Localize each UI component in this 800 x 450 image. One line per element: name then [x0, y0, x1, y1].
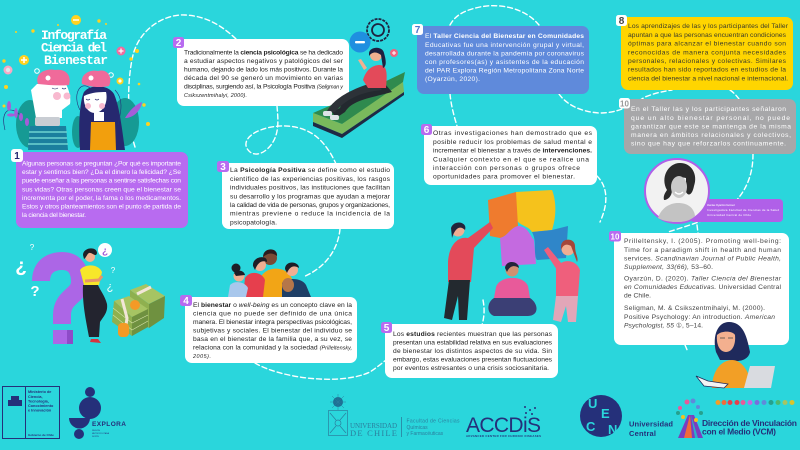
panel 1: intro: la ciencia del bienestar. [22, 212, 86, 219]
panel: references: en Comunidades Educativas. Universidad Central [624, 284, 782, 291]
panel: references: de Chile. [624, 293, 651, 300]
illustration: question mark and thinking man: ? [30, 283, 40, 300]
badge 4: 4 [183, 296, 189, 307]
portrait photo [645, 159, 709, 223]
photo caption: Universidad Central de Chile [707, 213, 751, 217]
panel: limitaciones: En el Taller las y los participantes señalaron [631, 106, 786, 113]
logo: Universidad de Chile [328, 394, 397, 438]
badge 10 gray: 10 [620, 100, 629, 108]
panel 2: ciencia psicológica: Tradicionalmente la ciencia psicológica se ha dedicado [184, 50, 343, 56]
panel 1: intro: Algunas personas se preguntan ¿Por qué es importante [22, 160, 181, 168]
panel 4: bienestar: El bienestar o well-being es un concepto clave en la [193, 302, 352, 309]
title: Infografía [41, 28, 107, 43]
badge 6 [421, 124, 432, 136]
badge 8: 8 [619, 16, 625, 27]
panel 7: taller [417, 26, 589, 94]
panel 3: psicología positiva: científico de las experiencias positivas, los rasgos [230, 176, 391, 183]
badge 5: 5 [384, 323, 390, 334]
panel: limitaciones: que un alto bienestar personal, no puede [631, 115, 790, 122]
badge 6: 6 [424, 125, 430, 136]
logo: Universidad Central: Universidad [629, 420, 673, 428]
illustration: people assembling puzzle [444, 190, 580, 322]
logo: Universidad Central: N [608, 422, 617, 437]
panel 8: aprendizajes: apuntan a que las personas encuentran condiciones [628, 32, 787, 39]
badge 2 [173, 37, 184, 49]
panel 5: estudios: embargo, estas evaluaciones presentan fluctuaciones [393, 356, 553, 364]
logo: Universidad de Chile: UNIVERSIDAD [350, 422, 397, 430]
panel 4: bienestar [185, 297, 357, 363]
panel 8: aprendizajes: reconocidas de manera conjunta necesidades [628, 49, 787, 56]
panel 7: taller: Educativas fue una intervención grupal y virtual, [425, 42, 584, 49]
panel 3: psicología positiva [222, 163, 394, 229]
logo: Ministerio de Ciencia: Ciencia, [28, 395, 43, 399]
panel 2: ciencia psicológica: a estudiar aspectos negativos y patológicos del ser [184, 58, 344, 65]
panel: references: Prilleltensky, I. (2005). Promoting well-being: [624, 238, 781, 245]
panel 1: intro: estar y sentirnos bien? ¿Da el dinero la felicidad? ¿Se [22, 169, 181, 176]
logo: Facultad de Ciencias: Químicas [406, 425, 428, 431]
panel 6: intervenciones: Cualquier contexto en el que se realice una [433, 156, 589, 163]
logo: Facultad de Ciencias: y Farmacéuticas [406, 431, 444, 437]
panel 8: aprendizajes: ciencia del bienestar a nivel nacional e internacional. [628, 75, 788, 82]
panel 7: taller: del PAR Explora Región Metropolitana Zona Norte [425, 68, 584, 75]
panel 3: psicología positiva: La Psicología Positiva se define como el estudio [230, 167, 390, 174]
logo: ACCDiS: ADVANCED CENTER FOR CHRONIC DISEASES [466, 434, 541, 438]
logo: Explora [69, 387, 126, 439]
logo: Universidad Central: C [586, 419, 596, 434]
logo: Ministerio de Ciencia: e Innovación [28, 408, 52, 412]
panel 8: aprendizajes: personales, relacionales y colectivas. Similares [628, 58, 787, 65]
panel 6: intervenciones: Otras investigaciones han demostrado que es [433, 130, 593, 137]
illustration: woman reading with laptop [696, 322, 775, 388]
panel: references: Time for a paradigm shift in health and human [624, 247, 781, 254]
illustration: money stacks and coins [112, 284, 165, 337]
panel: references: Oyarzún, D. (2020). Taller Ciencia del Bienestar [624, 275, 782, 282]
logo: Facultad de Ciencias: Facultad de Ciencias [406, 418, 460, 424]
panel 6: intervenciones: incrementar el bienestar a través de intervenciones. [433, 148, 592, 155]
logo: Universidad de Chile: DE CHILE [350, 428, 397, 438]
illustration: two people with brains [4, 70, 142, 150]
panel 7: taller: con profesores(as) y asistentes de la educación [425, 59, 584, 66]
panel 5: estudios: Los estudios recientes muestran que las personas [393, 331, 553, 338]
logo: Dirección de Vinculación [676, 398, 797, 438]
panel 2: ciencia psicológica: humano, dejando de lado los más positivos. Durante la [184, 66, 343, 74]
badge 4 [180, 295, 192, 307]
title: Ciencia del [41, 42, 107, 56]
panel 6: intervenciones: posible reducir los problemas de salud mental e [433, 139, 592, 146]
illustration: question mark and thinking man [15, 243, 116, 344]
photo caption: Denise Oyarzún Gómez [707, 203, 736, 207]
panel: references: Psychologist, 55 ①, 5–14. [624, 321, 703, 329]
panel: references [614, 233, 789, 345]
panel 7: taller: (Oyarzún, 2020). [425, 76, 480, 83]
badge 10 purple [609, 231, 621, 242]
panel 4: bienestar: relaciona con la comunidad y la sociedad (Prilleltensky, [193, 345, 352, 352]
logo: Dirección de Vinculación: con el Medio (VCM) [702, 426, 776, 436]
panel 2: ciencia psicológica: Csikszentmihalyi, 2000). [184, 93, 247, 99]
panel: limitaciones: garantizar que este se mantenga de la misma [631, 123, 791, 130]
panel 3: psicología positiva: mientras previene o reduce la incidencia de la [230, 211, 390, 218]
panel 6: intervenciones [424, 126, 597, 185]
logo: Ministerio de Ciencia: Tecnología, [28, 400, 49, 404]
panel 4: bienestar: subjetivas y sociales. El bienestar del individuo se [193, 328, 352, 335]
badge 1: 1 [14, 151, 20, 162]
illustration: question mark and thinking man: ? [30, 243, 35, 252]
logo: Explora: METROPOLITANA [92, 432, 110, 435]
panel 3: psicología positiva: individuales positivos, las instituciones que facilitan [230, 185, 390, 192]
logo: Universidad Central [580, 395, 673, 438]
dashed path connecting the steps [129, 6, 753, 379]
panel 8: aprendizajes [621, 17, 793, 90]
panel: limitaciones [624, 99, 796, 154]
panel 4: bienestar: basa en el bienestar de la familia que, a su vez, se [193, 336, 352, 343]
logo: Explora: REGIÓN [92, 429, 100, 432]
panel 1: intro: Estos y otros planteamientos son el punto de partida de [22, 204, 181, 210]
panel 3: psicología positiva: su desarrollo y los programas que ayudan a mejorar [230, 193, 391, 200]
panel: references: Seligman, M. & Csikszentmihalyi, M. (2000). [624, 305, 765, 312]
panel 6: intervenciones: oportunidades para promover el bienestar. [433, 174, 575, 181]
logo: Universidad Central: U [588, 396, 597, 411]
panel 1: intro [16, 152, 188, 228]
panel 3: psicología positiva: psicopatología. [230, 219, 277, 226]
badge 3: 3 [220, 162, 226, 173]
panel 4: bienestar: ciencia que no puede ser definido de una única [193, 311, 352, 318]
logo: ACCDiS: ACCDiS [466, 414, 541, 437]
badge 1 [11, 149, 23, 162]
badge 10 gray [619, 98, 630, 108]
badge 3 [217, 161, 229, 173]
panel 5: estudios: de bienestar los distintos aspectos de su vida. Sin [393, 348, 552, 355]
panel 5: estudios: por eventos estresantes o una crisis sociosanitaria. [393, 365, 549, 372]
logo: Explora: EXPLORA [92, 421, 126, 428]
logo: Facultad de Ciencias [401, 417, 460, 437]
panel: limitaciones: sino que hay que reforzarlos continuamente. [631, 141, 786, 148]
logo: Universidad Central: E [601, 406, 610, 421]
panel 4: bienestar: manera. El bienestar integra perspectivas psicológicas, [193, 319, 352, 326]
badge 5 [381, 322, 392, 334]
logo: Ministerio de Ciencia: Ministerio de [28, 390, 51, 394]
illustration: family [228, 249, 311, 297]
illustration: question mark and thinking man: ¿ [102, 246, 108, 257]
panel 7: taller: desarrollada durante la pandemia por coronavirus [425, 50, 585, 57]
panel 7: taller: El Taller Ciencia del Bienestar en Comunidades [425, 33, 584, 40]
panel: limitaciones: manera en ámbitos relacionales y colectivos, [631, 132, 791, 139]
logo: Ministerio de Ciencia: Gobierno de Chile [28, 433, 54, 437]
logo: Ministerio de Ciencia [2, 386, 60, 438]
badge 7 [412, 24, 423, 36]
illustration: woman on couch [313, 19, 405, 138]
panel 1: intro: sus vidas? Otras personas creen que el bienestar se [22, 186, 181, 193]
panel 1: intro: puede enseñar a las personas a sentirse satisfechas con [22, 178, 181, 185]
illustration: question mark and thinking man: ¿ [15, 256, 27, 277]
panel 5: estudios: presentan una estabilidad relativa en sus evaluaciones [393, 340, 553, 346]
logo: Universidad Central: Central [629, 429, 656, 438]
logo: Explora: NORTE [92, 436, 100, 438]
illustration: question mark and thinking man: ? [111, 266, 116, 275]
illustration: question mark and thinking man: ¿ [107, 281, 113, 293]
panel 8: aprendizajes: Los aprendizajes de las y los participantes del Taller [628, 23, 789, 30]
badge 2: 2 [176, 38, 182, 49]
panel 1: intro: incrementa por el poder, la fama o los medicamentos. [22, 195, 181, 202]
panel: references: Supplement, 33(66), 53–60. [624, 264, 713, 271]
photo caption [690, 199, 783, 222]
title [41, 28, 108, 68]
logo: Ministerio de Ciencia: Conocimiento [28, 404, 54, 408]
badge 7: 7 [415, 25, 421, 36]
photo caption: Investigadora Facultad de Ciencias de la Salud [707, 208, 779, 212]
panel 3: psicología positiva: la calidad de vida de personas, grupos y organizaciones, [230, 202, 390, 209]
panel 2: ciencia psicológica [177, 39, 349, 106]
panel 8: aprendizajes: óptimas para alcanzar el bienestar cuando son [628, 41, 786, 48]
panel 4: bienestar: 2005). [192, 354, 211, 360]
panel 2: ciencia psicológica: década del 90 se generó un movimiento en varias [184, 75, 344, 82]
panel 2: ciencia psicológica: disciplinas, surgiendo así, la Psicología Positiva (Seligman y [184, 84, 343, 90]
title: Bienestar [44, 53, 108, 68]
panel 8: aprendizajes: resultados han sido reportados en estudios de la [628, 67, 786, 74]
panel: references: Positive Psychology: An introduction. American [624, 314, 775, 321]
logo: Dirección de Vinculación: Dirección de Vinculación [702, 418, 797, 428]
badge 8 [616, 15, 627, 27]
panel 6: intervenciones: interacción con personas o grupos ofrece [433, 165, 580, 172]
panel 5: estudios [385, 324, 558, 378]
panel: references: services. Scandinavian Journal of Public Health, [624, 255, 781, 262]
icons: floating dots around the title [2, 15, 150, 126]
badge 10 purple: 10 [611, 232, 620, 242]
